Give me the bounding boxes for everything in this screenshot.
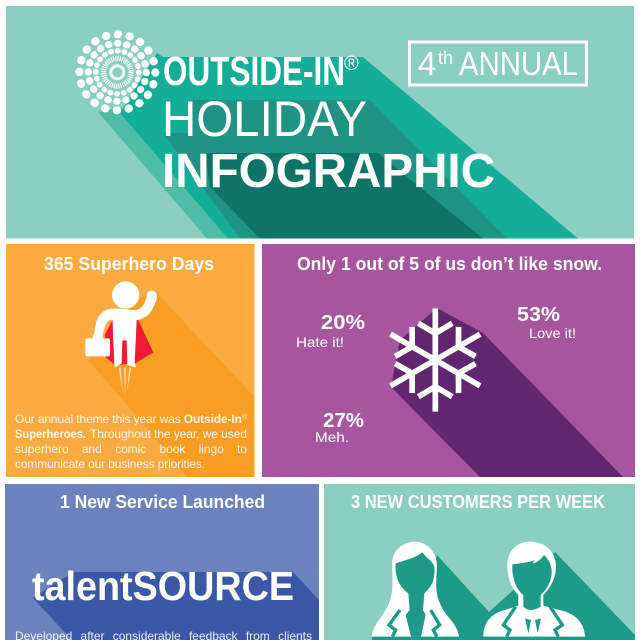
text: superhero theme: superhero and comic book lingo to (15, 442, 247, 456)
heading: snow poll: Only 1 out of 5 of us don’t like snow. (297, 254, 602, 274)
long shadow: talentSOURCE (33, 572, 319, 640)
panel: new customers (324, 484, 635, 640)
panel: snow poll (262, 244, 635, 477)
stat: 20 percent hate it: 20% (321, 312, 365, 334)
text: superhero theme: ® (242, 413, 248, 421)
long shadow: superhero (88, 293, 254, 477)
heading: new service: 1 New Service Launched (60, 492, 265, 512)
stat: 20 percent hate it (296, 312, 365, 350)
text: superhero theme: Superheroes. (15, 427, 86, 441)
text: superhero theme: Throughout the year, we used (90, 427, 247, 441)
stat: 53 percent love it (517, 304, 576, 341)
stat: 53 percent love it: 53% (517, 304, 560, 326)
icon: woman customer (372, 542, 459, 637)
panel: new service (5, 484, 319, 640)
panel: header (6, 6, 634, 238)
text: superhero theme (15, 412, 248, 471)
stat: 27 percent meh: 27% (323, 410, 364, 432)
stat: 20 percent hate it: Hate it! (296, 334, 344, 350)
badge: 4th annual: 4 (418, 45, 436, 82)
long shadow: snowflake (391, 308, 623, 477)
heading: Infographic: INFOGRAPHIC (162, 145, 495, 198)
stat: 27 percent meh: Meh. (315, 429, 349, 445)
long shadow: header layers (98, 53, 578, 238)
icon: Outside-In logo disc (79, 34, 155, 110)
text: talentSOURCE: talentSOURCE (32, 563, 294, 609)
badge: 4th annual (410, 42, 586, 85)
text: superhero theme: Our annual theme this year was Outside-In (15, 412, 242, 426)
badge: 4th annual: ANNUAL (459, 45, 578, 82)
heading: new customers: 3 NEW CUSTOMERS PER WEEK (351, 492, 605, 512)
heading: 365 superhero days: 365 Superhero Days (44, 254, 214, 274)
icon: man customer (483, 542, 585, 637)
long shadow: customers (372, 552, 635, 640)
registered mark: ® (344, 53, 359, 75)
heading: Holiday: HOLIDAY (162, 91, 367, 147)
icon: flying superhero (85, 281, 157, 396)
heading: Outside-In: OUTSIDE-IN (163, 48, 345, 94)
stat: 27 percent meh (315, 410, 364, 445)
stat: 53 percent love it: Love it! (529, 325, 576, 341)
icon: snowflake (382, 308, 489, 412)
badge: 4th annual: th (438, 48, 453, 68)
text: superhero theme: communicate our business priorities. (15, 457, 205, 471)
panel: 365 superhero days (6, 244, 254, 477)
